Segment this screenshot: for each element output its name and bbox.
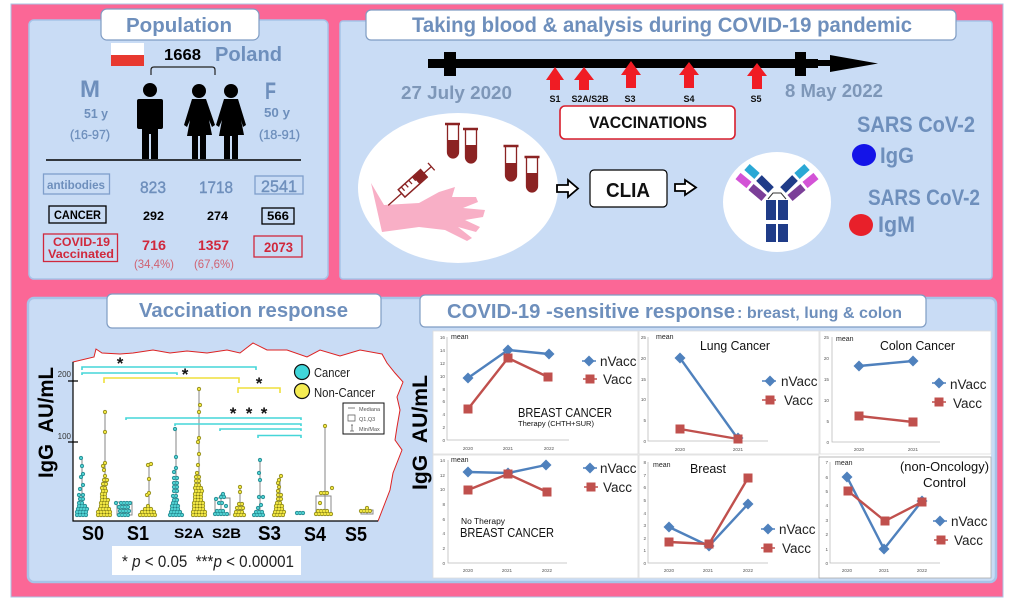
- chart: non-oncology control: 0: [825, 561, 828, 566]
- panel: population: [29, 9, 328, 279]
- chart: breast cancer no therapy: 2020: [463, 568, 474, 573]
- antibodies row: 1718: [199, 178, 233, 197]
- sample axis labels: [82, 523, 367, 546]
- chart: breast cancer therapy: 10: [440, 374, 445, 379]
- box plot key: [343, 403, 384, 434]
- icon: arm and hand: [371, 183, 485, 241]
- sensitive response heading: : breast, lung & colon: [737, 305, 902, 322]
- sampling arrows S1 to S5: [546, 61, 767, 90]
- sample axis labels: S3: [258, 523, 281, 545]
- chart: breast: 2022: [743, 568, 754, 573]
- icon: antibody: [738, 167, 816, 242]
- vaccinated row: (34,4%): [134, 257, 174, 271]
- vaccinated row: 716: [142, 237, 166, 253]
- IgG legend: [852, 112, 975, 168]
- cancer row: CANCER: [54, 208, 101, 222]
- legend: Non-Cancer: [314, 385, 376, 400]
- sample axis labels: S4: [304, 524, 327, 546]
- significance stars: *: [117, 354, 124, 373]
- chart: breast cancer therapy: 0: [442, 438, 445, 443]
- chart: breast cancer therapy: 16: [440, 335, 445, 340]
- chart: colon cancer: 15: [824, 377, 829, 382]
- chart: non-oncology control: 2022: [917, 568, 928, 573]
- chart: breast: 8: [643, 460, 646, 465]
- chart: non-oncology control: 3: [825, 518, 828, 523]
- start date: 27 July 2020: [401, 83, 512, 103]
- IgM legend: IgM: [878, 212, 915, 237]
- chart: vaccination response swarm: [58, 343, 403, 521]
- icon: Polish flag: [111, 43, 144, 66]
- chart: breast cancer no therapy: 10: [440, 487, 445, 492]
- chart: lung cancer: 25: [641, 335, 646, 340]
- chart: non-oncology control: 1: [825, 547, 828, 552]
- chart: lung cancer: 2021: [733, 447, 744, 452]
- chart: lung cancer: nVacc: [781, 374, 818, 389]
- axis ticks: 200: [58, 370, 72, 379]
- antibody circle: [723, 152, 831, 252]
- chart: breast: mean: [653, 462, 671, 469]
- chart: breast cancer therapy: 6: [442, 399, 445, 404]
- panel: blood sampling and analysis: [340, 10, 992, 279]
- chart: breast cancer no therapy: 12: [440, 473, 445, 478]
- analysis heading: Taking blood & analysis during COVID-19 pandemic: [412, 14, 912, 37]
- chart: breast: 6: [643, 485, 646, 490]
- chart: breast cancer no therapy: 6: [442, 517, 445, 522]
- chart: breast: 2020: [664, 568, 675, 573]
- chart: non-oncology control: mean: [835, 460, 853, 467]
- chart: non-oncology control: Control: [923, 475, 966, 490]
- sensitive response heading: COVID-19 -sensitive response: [447, 301, 735, 323]
- vaccinated row: Vaccinated: [48, 247, 114, 261]
- chart: breast: Breast: [690, 461, 726, 476]
- chart: colon cancer: 2020: [854, 447, 865, 452]
- chart: breast cancer no therapy: 2: [442, 546, 445, 551]
- chart: non-oncology control: 6: [825, 475, 828, 480]
- axis ticks: 100: [58, 432, 72, 441]
- total count 1668: 1668: [164, 47, 201, 64]
- chart: lung cancer: 20: [641, 356, 646, 361]
- vaccination response heading: [107, 294, 381, 328]
- male stats: 51 y: [84, 106, 109, 121]
- significance stars: *: [256, 374, 263, 393]
- sample axis labels: S1: [127, 523, 149, 545]
- box plot key: Q1,Q3: [359, 417, 375, 423]
- female stats: (18-91): [259, 127, 300, 142]
- sample labels: S2A/S2B: [572, 94, 609, 104]
- sample labels: S3: [624, 94, 636, 104]
- icon: man: [137, 83, 163, 159]
- vaccinated row: [44, 234, 302, 271]
- chart: breast cancer no therapy: nVacc: [600, 461, 637, 476]
- antibodies row: 823: [140, 178, 166, 197]
- antibodies row: antibodies: [47, 178, 105, 192]
- chart: colon cancer: 5: [826, 419, 829, 424]
- chart: colon cancer: 25: [824, 335, 829, 340]
- cancer dots: [77, 429, 306, 515]
- chart: breast cancer no therapy: 8: [442, 502, 445, 507]
- panel: bottom responses: [28, 294, 996, 582]
- end date: 8 May 2022: [785, 81, 883, 101]
- chart: breast cancer no therapy: BREAST CANCER: [460, 525, 554, 540]
- CLIA box: CLIA: [606, 180, 650, 202]
- chart: breast cancer no therapy: [433, 455, 638, 578]
- chart: lung cancer: 5: [643, 418, 646, 423]
- chart: breast cancer no therapy: 0: [442, 561, 445, 566]
- CLIA box: [590, 170, 667, 207]
- IgG legend: SARS CoV-2: [857, 112, 975, 137]
- box plot key: Mediana: [359, 407, 381, 413]
- chart: breast: Vacc: [782, 541, 811, 556]
- cancer row: [49, 206, 294, 224]
- chart: breast cancer no therapy: 2022: [542, 568, 553, 573]
- chart: breast: 1: [643, 548, 646, 553]
- whiskers: [82, 389, 367, 515]
- ground line: [46, 159, 301, 161]
- country label: Poland: [215, 44, 282, 66]
- cancer row: 566: [267, 209, 289, 223]
- chart: lung cancer: 15: [641, 377, 646, 382]
- p-value note: * p < 0.05 ***p < 0.00001: [122, 552, 294, 571]
- chart: breast cancer therapy: 2020: [463, 446, 474, 451]
- chart: lung cancer: Vacc: [784, 393, 813, 408]
- chart: breast cancer therapy: 8: [442, 387, 445, 392]
- p-value note: [112, 546, 301, 575]
- chart: breast cancer therapy: 12: [440, 361, 445, 366]
- analysis heading: [366, 10, 956, 40]
- arrow to CLIA: [557, 180, 578, 197]
- chart: non-oncology control: Vacc: [954, 533, 983, 548]
- chart: breast: 0: [643, 561, 646, 566]
- chart: colon cancer: [820, 331, 991, 454]
- chart: breast cancer therapy: Vacc: [603, 372, 632, 387]
- chart: breast cancer therapy: [433, 331, 638, 454]
- population heading: Population: [126, 15, 232, 37]
- vaccinated row: (67,6%): [194, 257, 234, 271]
- significance brackets: [82, 367, 301, 438]
- chart: lung cancer: 2020: [675, 447, 686, 452]
- population heading: [101, 9, 259, 40]
- axes: [68, 362, 378, 521]
- legend: Cancer: [314, 365, 351, 380]
- icon: woman: [184, 84, 215, 159]
- vaccinations label: [560, 106, 735, 139]
- non-cancer dots: [98, 389, 372, 515]
- male stats: (16-97): [70, 127, 110, 142]
- cancer row: 292: [143, 209, 164, 223]
- sample labels: S1: [549, 94, 561, 104]
- antibodies row: 2541: [261, 177, 297, 196]
- chart: colon cancer: Vacc: [953, 396, 982, 411]
- vaccinated row: 2073: [264, 239, 293, 255]
- chart: lung cancer: [639, 331, 819, 454]
- chart: lung cancer: 0: [643, 439, 646, 444]
- IgM legend: [849, 185, 980, 237]
- chart: breast cancer therapy: nVacc: [600, 354, 637, 369]
- chart: breast cancer therapy: 4: [442, 412, 445, 417]
- box plot key: Min/Max: [359, 427, 380, 433]
- icon: syringe: [385, 163, 435, 209]
- sample labels: S4: [683, 94, 695, 104]
- timeline arrow: [428, 52, 878, 76]
- chart: non-oncology control: (non-Oncology): [900, 459, 989, 474]
- chart: colon cancer: 10: [824, 398, 829, 403]
- chart: colon cancer: mean: [836, 336, 854, 343]
- IgM legend: SARS CoV-2: [868, 185, 980, 210]
- vaccination response heading: Vaccination response: [139, 300, 348, 322]
- chart: non-oncology control: 2021: [879, 568, 890, 573]
- sample axis labels: S5: [345, 524, 367, 546]
- chart: non-oncology control: 7: [825, 460, 828, 465]
- legend: [294, 364, 376, 400]
- significance stars: *: [230, 404, 237, 423]
- chart: breast: [639, 455, 819, 578]
- chart: lung cancer: mean: [656, 334, 674, 341]
- chart: non-oncology control: nVacc: [951, 514, 988, 529]
- IgG legend: IgG: [880, 143, 914, 168]
- significance stars: *: [261, 404, 268, 423]
- chart: breast: 7: [643, 473, 646, 478]
- chart: breast cancer therapy: mean: [451, 334, 469, 341]
- chart: colon cancer: 2021: [908, 447, 919, 452]
- chart: non-oncology control: 5: [825, 489, 828, 494]
- cancer row: 274: [207, 209, 228, 223]
- chart: breast cancer no therapy: 4: [442, 531, 445, 536]
- y axis label: IgG AU/mL: [409, 375, 432, 490]
- bracket over people: [151, 67, 215, 75]
- sample axis labels: S2A: [174, 525, 204, 541]
- arrow from CLIA: [675, 180, 696, 195]
- chart: colon cancer: 20: [824, 356, 829, 361]
- chart: colon cancer: Colon Cancer: [880, 338, 956, 353]
- vaccinations label: VACCINATIONS: [589, 113, 707, 132]
- antibodies row: [44, 174, 303, 197]
- icon: blood tubes: [445, 124, 540, 192]
- female stats: [259, 78, 300, 142]
- male stats: M: [80, 76, 100, 103]
- vaccinated row: 1357: [198, 237, 229, 253]
- significance stars: [117, 354, 268, 423]
- female stats: F: [265, 78, 276, 105]
- chart: breast: 4: [643, 511, 646, 516]
- blood draw circle: [358, 113, 558, 263]
- chart: breast cancer no therapy: 2021: [502, 568, 513, 573]
- icon: woman: [216, 84, 246, 159]
- y axis label: IgG AU/mL: [35, 367, 58, 478]
- sample labels: S5: [750, 94, 762, 104]
- chart: non-oncology control: [819, 457, 991, 578]
- chart: colon cancer: 0: [826, 440, 829, 445]
- chart: breast: 2021: [703, 568, 714, 573]
- chart: breast: 5: [643, 498, 646, 503]
- chart: breast cancer no therapy: Vacc: [603, 480, 632, 495]
- white chart backdrop: [433, 331, 991, 578]
- significance stars: *: [182, 365, 189, 384]
- male stats: [70, 76, 110, 142]
- female stats: 50 y: [264, 105, 291, 120]
- chart: breast cancer therapy: BREAST CANCER: [518, 405, 612, 420]
- sample labels: [549, 94, 762, 104]
- chart: lung cancer: 10: [641, 397, 646, 402]
- chart: lung cancer: Lung Cancer: [700, 338, 771, 353]
- chart: non-oncology control: 2020: [842, 568, 853, 573]
- chart: non-oncology control: 2: [825, 532, 828, 537]
- chart: breast: 3: [643, 523, 646, 528]
- sensitive response heading: [420, 295, 926, 327]
- chart: breast cancer therapy: 14: [440, 348, 445, 353]
- chart: breast cancer therapy: 2: [442, 425, 445, 430]
- chart: breast: 2: [643, 536, 646, 541]
- boxes: [117, 496, 373, 515]
- vaccinated row: COVID-19: [53, 235, 110, 249]
- chart: breast cancer no therapy: mean: [451, 457, 469, 464]
- chart: breast cancer therapy: Therapy (CHTH+SUR): [518, 421, 594, 428]
- chart: breast cancer therapy: 2022: [544, 446, 555, 451]
- chart: non-oncology control: 4: [825, 503, 828, 508]
- chart: breast cancer no therapy: 14: [440, 458, 445, 463]
- sample axis labels: S2B: [212, 525, 241, 541]
- significance stars: *: [246, 404, 253, 423]
- chart: colon cancer: nVacc: [950, 377, 987, 392]
- chart: breast: nVacc: [779, 522, 816, 537]
- sample axis labels: S0: [82, 523, 104, 545]
- axis ticks: [58, 370, 72, 441]
- chart: breast cancer therapy: 2021: [503, 446, 514, 451]
- chart: breast cancer no therapy: No Therapy: [461, 517, 505, 526]
